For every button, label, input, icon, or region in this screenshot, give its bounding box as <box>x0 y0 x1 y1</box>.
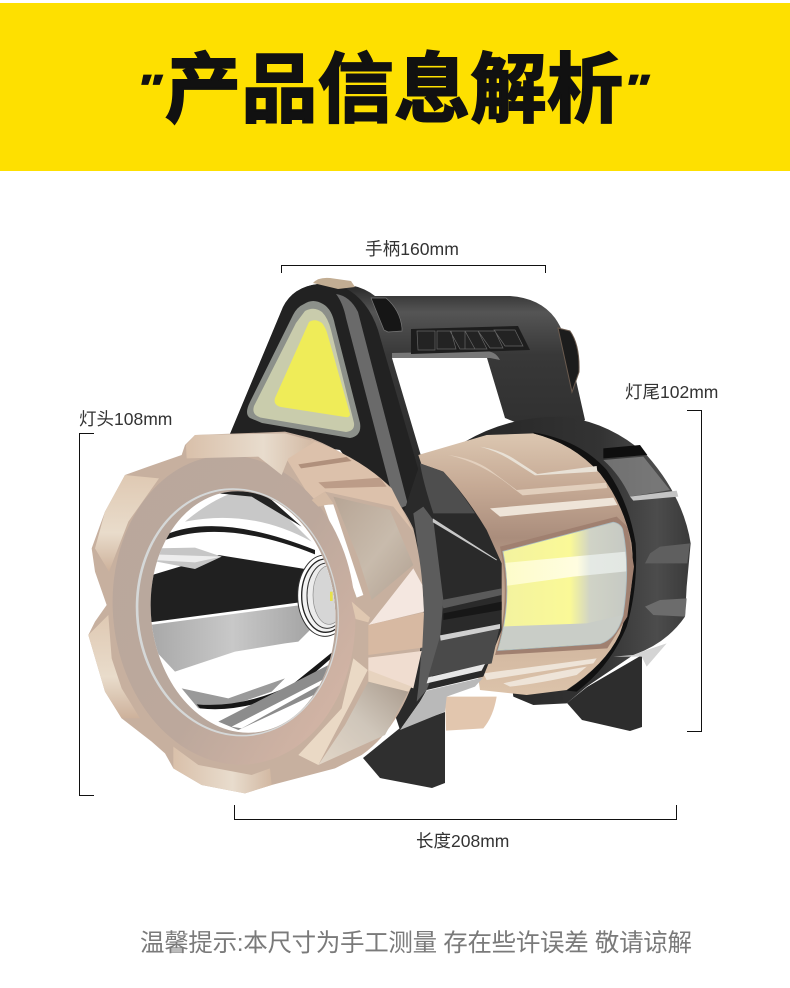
title: 产品信息解析 <box>165 28 623 138</box>
rear section drawn in zoom coordinates <box>390 417 691 731</box>
flashlight illustration <box>88 278 691 793</box>
cone lower panel <box>318 682 408 765</box>
title banner <box>0 3 790 171</box>
thumb wheel <box>313 278 355 289</box>
dimension: handle 160mm <box>282 239 546 273</box>
rear black ring <box>465 417 691 705</box>
middle black collar <box>390 463 502 730</box>
barrel dark rim <box>533 432 636 692</box>
title: " <box>136 67 163 110</box>
frame around side lamp <box>495 517 634 655</box>
rear handle clip <box>558 328 579 392</box>
dimension: head 108mm <box>79 409 172 796</box>
bezel and cone outline <box>88 432 423 793</box>
title: " <box>623 67 650 110</box>
dimension: length 208mm <box>234 805 676 851</box>
tan barrel <box>418 432 636 695</box>
lower reflector streaks <box>182 678 285 708</box>
triangle work lamp <box>247 301 360 438</box>
dimension: tail 102mm: 灯尾102mm <box>625 382 718 402</box>
COB side lamp <box>497 520 633 653</box>
head drawn in zoom coordinates <box>88 432 424 793</box>
barrel highlights <box>480 447 597 475</box>
handle and triangle frame <box>230 278 585 530</box>
cone pink and tan facets <box>368 568 424 688</box>
grey side strip <box>336 294 408 510</box>
cone right panel <box>333 497 413 600</box>
front foot <box>363 712 445 788</box>
grey reflection band <box>150 605 315 672</box>
cone top panels <box>285 440 413 532</box>
reflector <box>150 491 336 733</box>
bezel lugs <box>88 433 370 793</box>
front bezel face <box>97 443 371 777</box>
LED bulb <box>297 554 336 637</box>
reflector rim <box>124 478 351 747</box>
handle grip buttons <box>411 326 530 354</box>
dimension: tail 102mm <box>625 382 718 732</box>
handle slot <box>371 298 402 332</box>
footer note: 温馨提示:本尺寸为手工测量 存在些许误差 敬请谅解 <box>140 929 692 957</box>
dimension: handle 160mm: 手柄160mm <box>365 239 459 259</box>
rear foot <box>567 655 642 731</box>
dimension: head 108mm: 灯头108mm <box>79 409 172 429</box>
lower tan stem <box>445 697 497 731</box>
dark reflection band <box>150 555 305 622</box>
dimension: length 208mm: 长度208mm <box>416 831 509 851</box>
